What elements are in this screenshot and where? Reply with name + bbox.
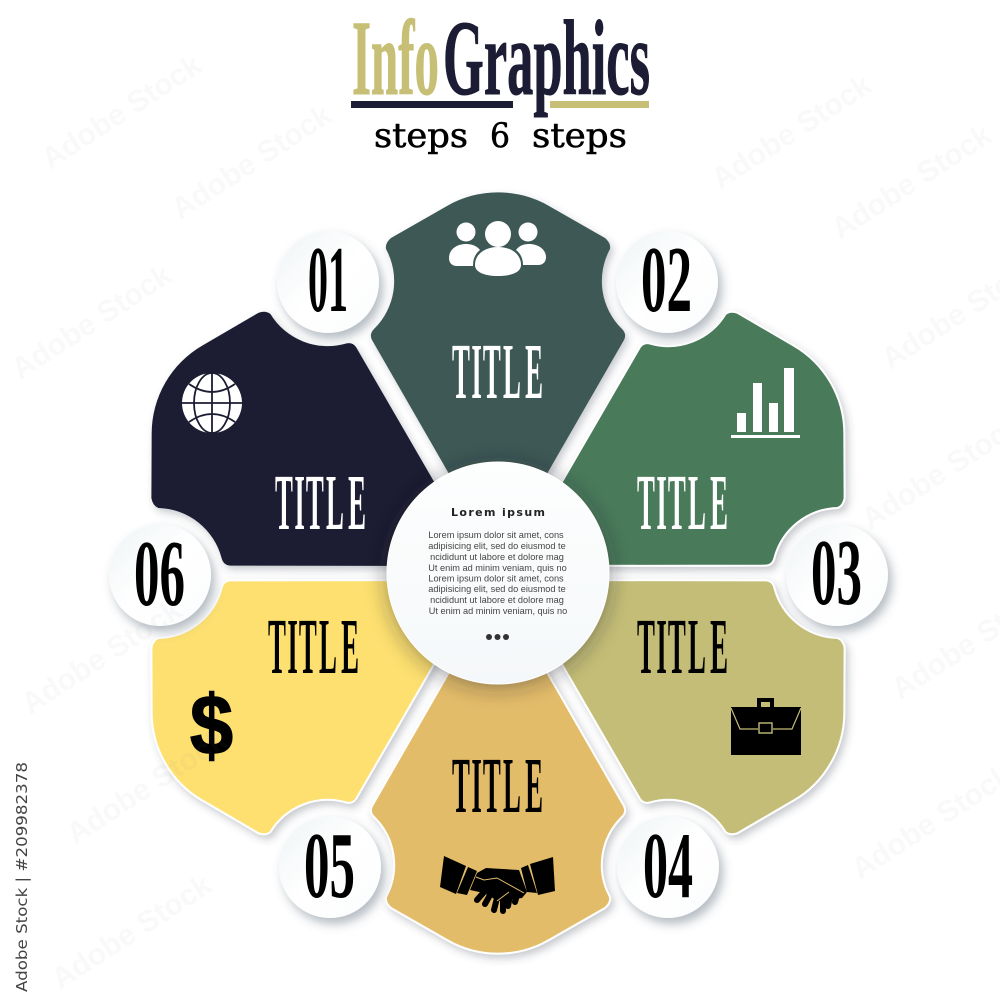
number badge 05: 05 [304, 814, 355, 918]
heading: step 04 title: TITLE [452, 741, 543, 829]
subtitle: 6 [490, 116, 510, 156]
number badge 02: 02 [641, 228, 692, 332]
number badge 02 [616, 228, 718, 333]
number badge 01 [277, 228, 379, 333]
center body text: Ut enim ad minim veniam, quis no [429, 606, 567, 616]
watermark: Adobe Stock [826, 118, 998, 246]
panel: step 02 green [450, 273, 894, 676]
stock id vertical text: Adobe Stock | #209982378 [13, 762, 31, 992]
heading: step 06 title: TITLE [275, 458, 366, 546]
center body text: Lorem ipsum dolor sit amet, cons [428, 530, 564, 540]
subtitle [374, 116, 627, 156]
watermark: Adobe Stock [36, 48, 208, 176]
panel: center circle [387, 462, 609, 684]
subtitle: steps [374, 116, 468, 156]
title: Info [352, 0, 439, 118]
icon: handshake [440, 856, 555, 911]
number badge 06: 06 [134, 522, 185, 626]
number badge 03: 03 [811, 521, 862, 625]
panel: step 05 yellow [102, 470, 546, 873]
center body text: Ut enim ad minim veniam, quis no [428, 563, 567, 573]
watermark: Adobe Stock [61, 723, 233, 851]
number badge 03 [786, 521, 888, 626]
number badge 04 [617, 814, 719, 918]
watermark: Adobe Stock [706, 68, 878, 196]
number badge 05 [279, 814, 381, 918]
number badge 01: 01 [308, 228, 348, 332]
icon: people [449, 221, 546, 276]
icon: dollar: $ [190, 678, 233, 772]
watermark: Adobe Stock [6, 258, 178, 386]
subtitle: steps [532, 116, 627, 156]
number badge 04: 04 [643, 814, 693, 918]
heading: step 03 title: TITLE [637, 602, 728, 690]
center body text: ncididunt ut labore et dolore mag [430, 595, 564, 605]
panel: step 04 amber [371, 587, 625, 954]
center body text: Lorem ipsum dolor sit amet, cons [428, 574, 564, 584]
panel: step 06 navy [102, 273, 546, 676]
watermark: Adobe Stock [16, 593, 188, 721]
watermark: Adobe Stock [166, 98, 338, 226]
heading: step 01 title: TITLE [452, 327, 543, 415]
center body text: adipisicing elit, sed do eiusmod te [428, 541, 566, 551]
panel: step 03 olive [450, 470, 894, 873]
heading: step 05 title: TITLE [268, 602, 359, 690]
text: Graphics [443, 0, 650, 118]
center dots [486, 634, 509, 640]
panel: step 01 teal [371, 192, 625, 559]
center body text [428, 530, 567, 616]
heading: step 02 title: TITLE [637, 458, 728, 546]
number badge 06 [109, 522, 211, 626]
center heading: Lorem ipsum [451, 506, 545, 519]
watermark: Adobe Stock [46, 868, 218, 996]
title [351, 0, 650, 118]
icon: globe [182, 373, 242, 433]
icon: briefcase [731, 698, 801, 755]
center body text: adipisicing elit, sed do eiusmod te [428, 584, 566, 594]
center body text: ncididunt ut labore et dolore mag [430, 552, 564, 562]
icon: bar chart [731, 368, 800, 438]
